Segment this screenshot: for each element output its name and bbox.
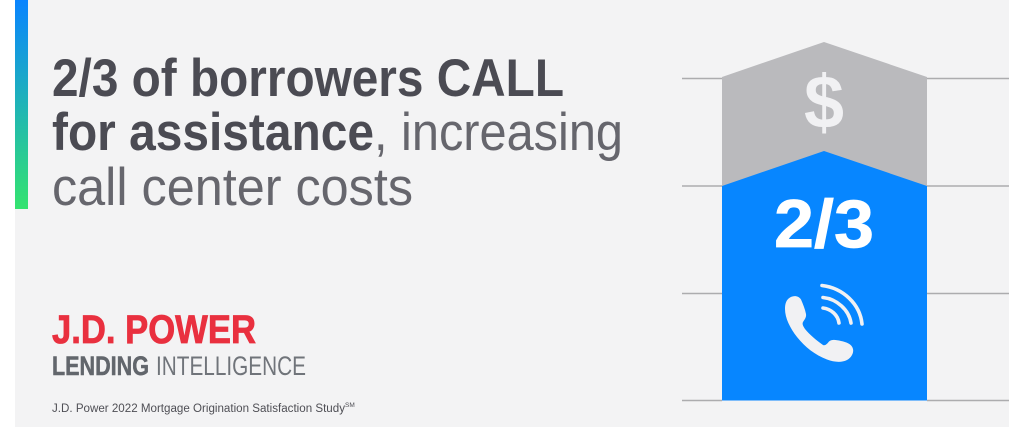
- blue call arrow column: [722, 151, 927, 400]
- logo: J.D. Power Lending Intelligence: J.D. POWER: [52, 308, 256, 352]
- grey cost arrow column: [722, 42, 927, 186]
- headline: call center costs: [52, 158, 413, 217]
- chart gridlines: [682, 78, 1009, 400]
- headline: [52, 49, 623, 217]
- logo: J.D. Power Lending Intelligence: [52, 308, 306, 381]
- headline: 2/3 of borrowers CALL: [52, 49, 564, 108]
- icon: dollar sign: $: [804, 60, 844, 144]
- gradient accent bar: [15, 0, 28, 209]
- logo: J.D. Power Lending Intelligence: LENDING: [52, 351, 149, 381]
- logo: J.D. Power Lending Intelligence: INTELLIGENCE: [156, 351, 306, 381]
- icon: phone with signal waves: [785, 286, 862, 362]
- headline: , increasing: [374, 103, 623, 162]
- headline: for assistance: [52, 103, 374, 162]
- two thirds figure: 2/3: [774, 186, 874, 262]
- source note: J.D. Power 2022 Mortgage Origination Satisfaction Study: [52, 403, 345, 415]
- source note: SM: [345, 402, 355, 409]
